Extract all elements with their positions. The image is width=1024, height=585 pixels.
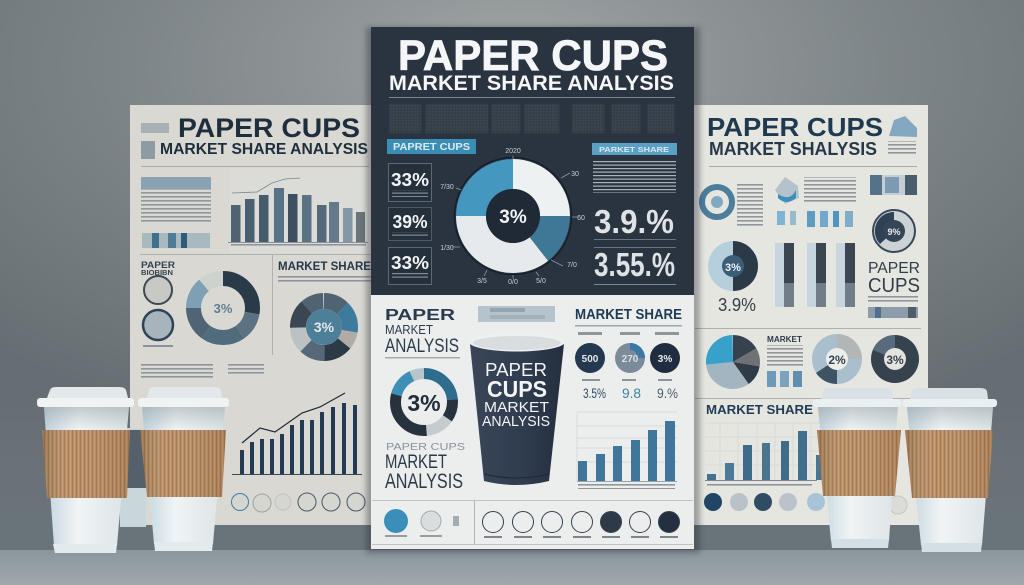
- takeaway cup 1: [37, 387, 134, 553]
- right poster donut three percent: [871, 335, 919, 383]
- donut callout labels: 60: [577, 215, 585, 222]
- right poster coloured pie: [720, 348, 746, 376]
- right poster bottom icons: [704, 493, 907, 514]
- left poster image strip: [142, 233, 210, 248]
- donut callout labels: 30: [571, 171, 579, 178]
- bottom right icon captions: [484, 536, 678, 538]
- left poster paper label: [141, 260, 176, 277]
- right poster dark ring: [873, 210, 915, 252]
- left poster segmented donut: [298, 301, 350, 353]
- heading: paper cups market analysis: MARKET: [385, 452, 447, 473]
- stat box 33% lower: [388, 248, 432, 284]
- right poster market share heading: MARKET SHARE: [706, 402, 813, 417]
- donut callout labels: 1/30: [440, 245, 454, 252]
- statistic 3.55%: 3.55.%: [594, 246, 675, 283]
- market share label: [592, 143, 677, 155]
- stat box 39%: [388, 208, 432, 240]
- right poster paper cups label: CUPS: [868, 275, 920, 297]
- left poster text block: [141, 177, 211, 223]
- right poster colour strip: [868, 296, 918, 318]
- left poster bottom icons: [232, 493, 365, 512]
- center title: MARKET SHARE ANALYSIS: [389, 72, 674, 95]
- panel: right poster: [690, 105, 928, 525]
- right poster paper cups label: PAPER: [868, 260, 920, 277]
- right poster blue graphic and notes: [775, 177, 856, 227]
- heading: paper market analysis: [385, 307, 459, 357]
- takeaway cup 4: [903, 388, 997, 552]
- right poster title: [707, 112, 883, 159]
- cup label: PAPER: [485, 360, 547, 380]
- cup label: ANALYSIS: [482, 413, 550, 430]
- panel: center poster light section: [371, 295, 694, 549]
- right poster picture tile: [870, 175, 917, 195]
- gauge 3: 3%: [658, 354, 672, 365]
- right poster bar chart: [705, 423, 822, 486]
- right poster donut three percent: 3%: [886, 353, 904, 367]
- right poster dark ring: 9%: [887, 227, 901, 237]
- gauge 1: [575, 343, 605, 373]
- bottom left icons: [384, 509, 459, 537]
- left poster market share heading: MARKET SHARE: [278, 259, 371, 273]
- right poster paper cups label: [868, 260, 920, 297]
- panel: center poster dark section: [371, 27, 694, 295]
- cup label: MARKET: [484, 399, 549, 416]
- left blue label: [387, 139, 476, 154]
- gauge 1: 500: [582, 354, 599, 365]
- left poster donut centre value: 3%: [214, 301, 233, 316]
- left poster paper label: PAPER: [141, 260, 176, 270]
- right poster statistic: 3.9%: [718, 295, 756, 315]
- donut callout labels: [440, 148, 585, 286]
- cup label: CUPS: [487, 376, 547, 402]
- left poster title: [160, 113, 368, 158]
- gauge 2: 270: [622, 354, 639, 365]
- right poster donut two percent: [812, 334, 862, 384]
- left poster round icons: [143, 276, 173, 347]
- lower left donut: 3%: [407, 390, 441, 416]
- market share paragraph: [593, 160, 676, 193]
- gauge values: [582, 379, 678, 401]
- stat box 33%: 33%: [391, 170, 429, 190]
- center donut chart: 3%: [499, 207, 527, 228]
- center bar chart: [577, 412, 677, 489]
- heading: paper market analysis: MARKET: [385, 322, 433, 337]
- left poster title: MARKET SHARE ANALYSIS: [160, 141, 368, 158]
- right poster half pie: 3%: [725, 262, 741, 274]
- cup label: [482, 360, 550, 430]
- donut callout labels: 5/0: [536, 278, 546, 285]
- takeaway cup 2: [138, 387, 229, 551]
- center texture strip: [389, 104, 675, 133]
- left poster paper label: BIOBIBN: [141, 270, 173, 277]
- panel: left poster: [130, 105, 375, 525]
- left poster small emblem: [141, 123, 169, 159]
- donut callout labels: 2020: [505, 148, 521, 155]
- background cup, left: [119, 428, 146, 527]
- market share label: PARKET SHARE: [599, 147, 669, 154]
- dark paper cup: [469, 332, 565, 485]
- left poster donut: [194, 278, 252, 338]
- stat box 33% lower: 33%: [391, 253, 429, 273]
- heading: paper cups market analysis: PAPER CUPS: [386, 442, 465, 453]
- right poster ring chart: [702, 182, 763, 227]
- gauge 2: [615, 343, 645, 373]
- right poster emblem: [888, 116, 917, 155]
- stat box 33%: [388, 164, 432, 202]
- top centre picture strip: [478, 306, 555, 322]
- small labels over gauges: [578, 332, 679, 335]
- right poster stacked bars: [775, 243, 855, 307]
- heading: paper market analysis: ANALYSIS: [385, 336, 459, 357]
- gauge 3: [650, 343, 680, 373]
- center poster shadow: [366, 27, 700, 553]
- takeaway cup 3: [813, 388, 901, 548]
- floor: [0, 550, 1024, 585]
- donut callout labels: 7/30: [440, 184, 454, 191]
- heading: paper cups market analysis: [385, 442, 465, 493]
- donut callout labels: 7/0: [567, 262, 577, 269]
- left blue label: PAPRET CUPS: [393, 142, 470, 153]
- stat box 39%: 39%: [392, 212, 428, 232]
- heading: paper cups market analysis: ANALYSIS: [385, 470, 463, 493]
- right poster market note: MARKET: [767, 335, 802, 344]
- donut callout labels: 0/0: [508, 279, 518, 286]
- gauge values: 9.%: [657, 385, 678, 401]
- bottom right icon row: [482, 512, 680, 532]
- right poster title: PAPER CUPS: [707, 112, 883, 142]
- left poster line and bar chart: [232, 393, 362, 475]
- left poster lower text blocks: [141, 364, 264, 379]
- left poster bar chart: [228, 168, 371, 253]
- right poster title: MARKET SHALYSIS: [709, 139, 877, 159]
- donut callout labels: 3/5: [477, 278, 487, 285]
- center donut chart: [454, 158, 572, 274]
- gauge values: 3.5%: [583, 385, 606, 401]
- left poster segmented donut: 3%: [314, 319, 335, 335]
- market share heading: MARKET SHARE: [575, 307, 682, 323]
- gauge values: 9.8: [622, 385, 641, 401]
- right poster donut two percent: 2%: [828, 353, 846, 367]
- right poster market note: [767, 335, 803, 387]
- left poster title: PAPER CUPS: [178, 113, 360, 143]
- statistic 3.9%: 3.9.%: [594, 203, 674, 240]
- center title: PAPER CUPS: [398, 32, 668, 80]
- lower left donut: [396, 374, 452, 430]
- right poster half pie: [708, 241, 758, 291]
- heading: paper market analysis: PAPER: [385, 307, 456, 324]
